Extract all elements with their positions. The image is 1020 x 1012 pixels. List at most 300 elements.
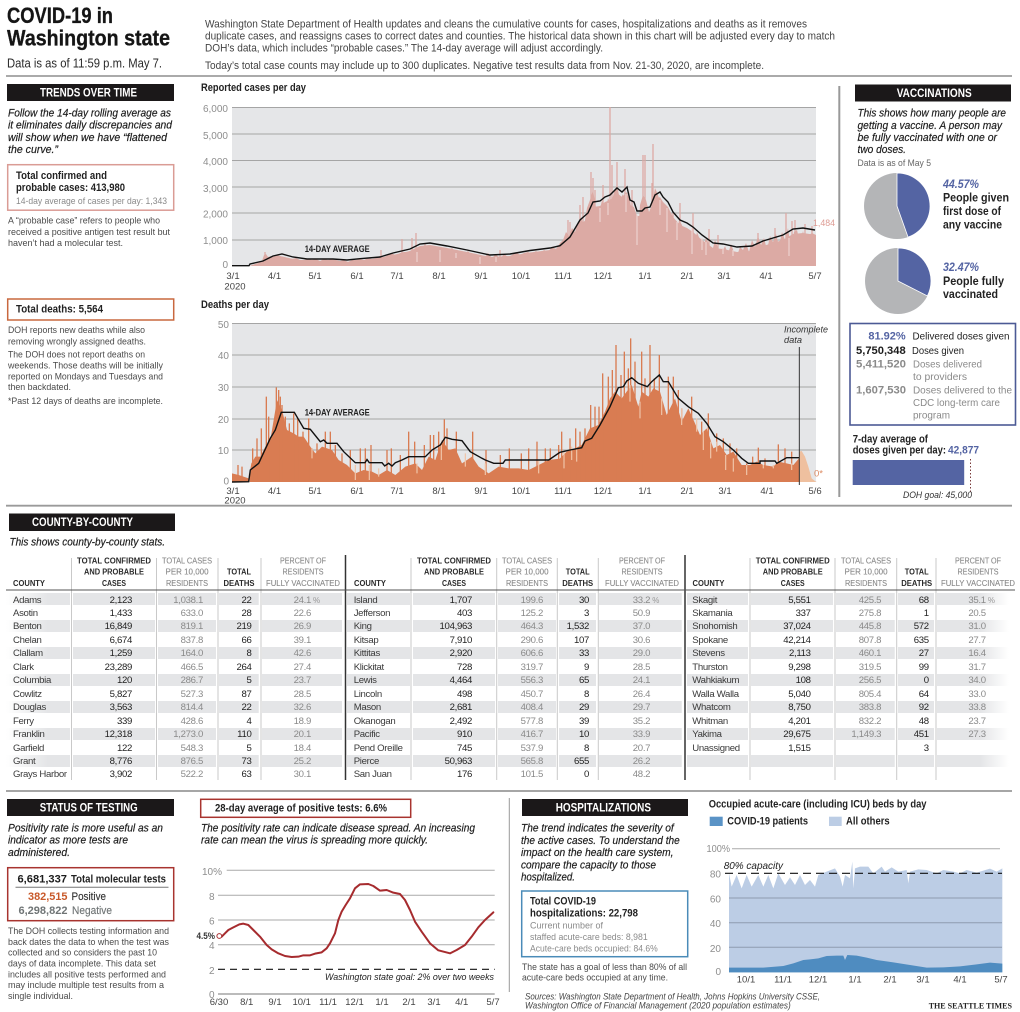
note: capacity goal: The state has a goal of less than 80% of all <box>522 961 687 972</box>
y axis labels: 20 <box>710 944 721 955</box>
title block: COVID-19 in <box>7 3 113 28</box>
table: Skagit to Unassigned: Unassigned <box>692 743 740 754</box>
table: Island to San Juan: Kittitas <box>354 648 380 659</box>
x axis labels: 7/1 <box>390 271 404 282</box>
intro note: duplicate cases, and reassigns cases to correct dates and counties. The historical data shown in this chart will be adjusted every day to match <box>205 30 835 42</box>
table: Island to San Juan: San Juan <box>354 769 392 780</box>
table: Adams to Grays Harbor: 6,674 <box>110 635 132 646</box>
table: Island to San Juan: 29.7 <box>633 702 650 713</box>
sources: Sources: Washington State Department of Health, Johns Hopkins University CSSE, <box>525 991 820 1001</box>
note: testing data: includes all positive tests performed and <box>8 968 166 979</box>
table: Adams to Grays Harbor: 73 <box>241 756 252 767</box>
y axis labels <box>706 844 730 978</box>
note: deaths reporting <box>7 324 163 406</box>
table: Skagit to Unassigned: Whitman <box>692 716 728 727</box>
note: deaths reporting: reported on Mondays and Tuesdays and <box>8 370 163 382</box>
column headers: table 3: RESIDENTS <box>845 578 887 588</box>
column headers: table 2: TOTAL CONFIRMED <box>417 556 491 566</box>
note: testing data: may include multiple test results from a <box>8 979 165 990</box>
table: Island to San Juan: 1,532 <box>567 621 589 632</box>
heading: hospitalizations <box>522 799 688 816</box>
x axis labels: 11/1 <box>319 997 337 1008</box>
x axis labels: 2020 <box>224 496 246 506</box>
table: Adams to Grays Harbor: 8 <box>246 648 252 659</box>
y axis labels: 30 <box>218 383 229 394</box>
box: total hospitalizations: Acute-care beds occupied: 84.6% <box>530 944 658 955</box>
box: total hospitalizations: staffed acute-care beds: 8,981 <box>530 932 648 943</box>
intro text: hospitalizations: compare the capacity to those <box>521 860 656 872</box>
label: latest 0*: 0* <box>814 469 823 480</box>
x axis labels: 5/6 <box>808 486 822 497</box>
table: Adams to Grays Harbor: 1,433 <box>110 608 132 619</box>
column headers: table 1: DEATHS <box>224 578 255 588</box>
note: testing data <box>8 925 169 1001</box>
table: Island to San Juan: 33 <box>579 648 589 659</box>
column headers: table 3: PERCENT OF <box>955 556 1001 566</box>
x axis labels <box>210 997 500 1008</box>
table: Skagit to Unassigned: 27 <box>919 648 929 659</box>
intro text: rolling average <box>8 108 173 156</box>
table: Island to San Juan: 577.8 <box>521 716 543 727</box>
x axis labels: 9/1 <box>268 997 282 1008</box>
x axis labels: 3/1 <box>427 997 441 1008</box>
column headers: table 3: TOTAL <box>905 566 929 576</box>
column headers: table 3: RESIDENTS <box>958 566 999 576</box>
table: Skagit to Unassigned: Wahkiakum <box>692 675 739 686</box>
box: test totals: Positive <box>72 891 106 903</box>
table: Adams to Grays Harbor: Cowlitz <box>13 689 42 700</box>
table: Island to San Juan: 2,681 <box>450 702 472 713</box>
column headers: table 2: RESIDENTS <box>506 578 548 588</box>
column headers: table 3: DEATHS <box>901 578 932 588</box>
table: Adams to Grays Harbor: 120 <box>117 675 132 686</box>
heading: county by county <box>9 514 175 531</box>
note: probable case: A “probable case” refers to people who <box>8 214 160 226</box>
stat: first dose: 44.57% <box>942 177 979 191</box>
capacity line: 80 percent <box>725 872 1002 874</box>
table: Skagit to Unassigned: 337 <box>796 608 811 619</box>
table: Adams to Grays Harbor: 16,849 <box>105 621 132 632</box>
intro text: vaccinations: two doses. <box>858 144 906 156</box>
box: doses: 1,607,530 <box>856 384 906 396</box>
table: Skagit to Unassigned: Walla Walla <box>692 689 739 700</box>
table: Adams to Grays Harbor: Grant <box>13 756 35 767</box>
area: covid-19 patients <box>729 955 1002 972</box>
table: Island to San Juan: 319.7 <box>521 662 543 673</box>
table: Island to San Juan: 26.4 <box>633 689 650 700</box>
panel: county by county <box>6 514 1015 780</box>
x axis labels: 8/1 <box>240 997 253 1008</box>
bar: 7-day average doses: DOH goal: 45,000 <box>903 490 972 500</box>
table: Adams to Grays Harbor: 819.1 <box>181 621 203 632</box>
label: 14-day average: 14-DAY AVERAGE <box>305 244 370 254</box>
callout: total deaths <box>8 299 174 320</box>
table: Skagit to Unassigned: 319.5 <box>859 662 881 673</box>
table: Island to San Juan: Jefferson <box>354 608 390 619</box>
column headers: table 2: PER 10,000 <box>506 566 549 576</box>
table: Island to San Juan: 33.9 <box>633 729 650 740</box>
chart title: deaths: Deaths per day <box>201 299 270 311</box>
stat: fully vaccinated: People fully <box>943 274 1004 288</box>
table: Island to San Juan: 9 <box>584 662 589 673</box>
table: Island to San Juan: 8 <box>584 743 589 754</box>
intro text: hospitalizations: impact on the health care system, <box>521 847 674 859</box>
box: doses <box>850 324 1016 425</box>
table: Island to San Juan: 537.9 <box>521 743 543 754</box>
x axis labels: 12/1 <box>809 975 827 986</box>
box: doses: to providers <box>913 372 967 383</box>
box: total hospitalizations <box>522 891 688 957</box>
table: Adams to Grays Harbor: 3,902 <box>110 769 132 780</box>
table: Island to San Juan: 498 <box>457 689 472 700</box>
table: Island to San Juan: 37.0 <box>633 621 650 632</box>
table: Skagit to Unassigned: Thurston <box>692 662 728 673</box>
table: Island to San Juan: 745 <box>457 743 472 754</box>
column headers: table 1: TOTAL <box>227 566 251 576</box>
box: doses: 5,750,348 <box>856 345 906 357</box>
bar: 7-day average doses: 42,877 <box>948 444 979 456</box>
table: Skagit to Unassigned: 34.0 <box>968 675 986 686</box>
table: Island to San Juan: 30.6 <box>633 635 650 646</box>
box: total hospitalizations: hospitalizations: 22,798 <box>530 908 638 920</box>
box: total hospitalizations: Current number of <box>530 921 603 932</box>
intro note: Washington State Department of Health updates and cleans the cumulative counts for cases, hospitalizations and deaths as it removes <box>205 18 807 30</box>
table: Adams to Grays Harbor: 23.7 <box>294 675 311 686</box>
y axis labels: 1,000 <box>203 236 228 247</box>
table: Island to San Juan: 104,963 <box>440 621 472 632</box>
x axis labels: 2/1 <box>883 975 897 986</box>
table: Adams to Grays Harbor: 39.1 <box>294 635 311 646</box>
y axis labels <box>202 867 222 1001</box>
column headers: table 2: DEATHS <box>562 578 593 588</box>
stat: first dose: first dose of <box>943 204 1001 218</box>
y axis labels: 50 <box>218 320 229 331</box>
table: Adams to Grays Harbor: Ferry <box>13 716 34 727</box>
table: Skagit to Unassigned: 33.8 <box>968 702 986 713</box>
table: Adams to Grays Harbor: 522.2 <box>181 769 203 780</box>
box: doses: Delivered doses given <box>912 331 1010 342</box>
column headers: table 1: COUNTY <box>13 578 45 588</box>
box: test totals: 6,298,822 <box>18 905 68 917</box>
box: test totals: Total molecular tests <box>71 873 166 885</box>
table: Island to San Juan: 50,963 <box>445 756 472 767</box>
y axis labels: 4,000 <box>203 157 228 168</box>
area: all others <box>729 862 1002 972</box>
sources <box>525 991 820 1010</box>
box: doses: Doses delivered <box>913 360 982 370</box>
table: Adams to Grays Harbor: 63 <box>241 769 252 780</box>
data date: Data is as of May 5 <box>858 158 931 168</box>
marker: start value: 4.5% <box>196 931 215 941</box>
y axis labels <box>203 104 228 271</box>
x axis labels: 3/1 <box>226 486 240 497</box>
callout: total cases: 14-day average of cases per day: 1,343 <box>16 196 167 207</box>
text: positivity explanation: The positivity rate can indicate disease spread. An increasing <box>201 822 475 834</box>
x axis labels: 6/1 <box>350 271 364 282</box>
note: probable case <box>8 214 170 248</box>
chart: positivity rate <box>196 867 500 1008</box>
table: Adams to Grays Harbor: 527.3 <box>181 689 203 700</box>
table: Adams to Grays Harbor: Franklin <box>13 729 45 740</box>
table: Skagit to Unassigned <box>687 593 1000 767</box>
note: testing data: collected and so considers the past 10 <box>8 947 157 958</box>
table: Skagit to Unassigned: 48 <box>919 716 929 727</box>
table: Island to San Juan: 556.3 <box>521 675 543 686</box>
note: deaths reporting: then backdated. <box>8 381 71 392</box>
stat: first dose: any vaccine <box>943 218 1002 232</box>
table: Adams to Grays Harbor: 28 <box>241 608 252 619</box>
callout: 28-day average <box>201 799 411 817</box>
table: Island to San Juan: 1,707 <box>450 595 472 606</box>
table: Adams to Grays Harbor: 3,563 <box>110 702 132 713</box>
table: Adams to Grays Harbor: 164.0 <box>181 648 203 659</box>
x axis labels: 4/1 <box>759 271 773 282</box>
table: Adams to Grays Harbor: 4 <box>246 716 252 727</box>
table: Skagit to Unassigned: 27.3 <box>968 729 986 740</box>
table: Island to San Juan: 24.1 <box>633 675 650 686</box>
table: Island to San Juan: 48.2 <box>633 769 650 780</box>
table: Adams to Grays Harbor: Clallam <box>13 648 43 659</box>
table: Island to San Juan <box>347 593 682 780</box>
annotation: incomplete data: Incomplete <box>784 325 828 335</box>
note: probable case: haven’t had a molecular test. <box>8 237 123 248</box>
chart: occupied beds <box>706 798 1008 986</box>
table: Island to San Juan: 450.7 <box>521 689 543 700</box>
y axis labels: 3,000 <box>203 184 228 195</box>
table: Skagit to Unassigned: 460.1 <box>859 648 881 659</box>
table: Island to San Juan: Lincoln <box>354 689 382 700</box>
y axis labels: 0 <box>209 990 215 1001</box>
table: Adams to Grays Harbor: 42.6 <box>294 648 311 659</box>
table: Adams to Grays Harbor: 28.5 <box>294 689 311 700</box>
y axis labels: 20 <box>218 415 229 426</box>
text: positivity explanation: rate can mean the virus is spreading more quickly. <box>201 834 428 846</box>
x axis labels: 9/1 <box>474 271 488 282</box>
x axis labels: 8/1 <box>432 486 446 497</box>
table: Island to San Juan: 107 <box>574 635 589 646</box>
note: testing data: single individual. <box>8 990 73 1001</box>
table: Adams to Grays Harbor: 1,273.0 <box>173 729 203 740</box>
column headers: table 3 <box>692 556 1015 588</box>
y axis labels: 6,000 <box>203 104 228 115</box>
table: Adams to Grays Harbor: 30.1 <box>294 769 311 780</box>
table: Skagit to Unassigned: Spokane <box>692 635 728 646</box>
table: Adams to Grays Harbor: 2,123 <box>110 595 132 606</box>
column headers: table 1: PERCENT OF <box>280 556 326 566</box>
intro text: positivity <box>8 822 163 859</box>
x axis labels <box>224 271 822 292</box>
table: Skagit to Unassigned: 99 <box>919 662 929 673</box>
table: Skagit to Unassigned: 451 <box>914 729 929 740</box>
table: Adams to Grays Harbor: 20.1 <box>294 729 311 740</box>
table: Skagit to Unassigned: % <box>988 596 995 605</box>
x axis labels: 2/1 <box>680 486 694 497</box>
column headers: table 2: TOTAL <box>566 566 590 576</box>
table: Adams to Grays Harbor: 5,827 <box>110 689 132 700</box>
table: Adams to Grays Harbor: 25.2 <box>294 756 311 767</box>
table: Skagit to Unassigned: 0 <box>924 675 929 686</box>
x axis labels: 12/1 <box>594 486 612 497</box>
table: Skagit to Unassigned: 92 <box>919 702 929 713</box>
bars: daily deaths, left part <box>232 387 562 482</box>
heading: status of testing <box>7 799 174 816</box>
x axis labels: 10/1 <box>737 975 755 986</box>
intro note: DOH’s data, which includes “probable cases.” The 14-day average will adjust accordingly. <box>205 42 603 54</box>
box: doses: 5,411,520 <box>856 358 906 370</box>
table: Adams to Grays Harbor: 26.9 <box>294 621 311 632</box>
table: Skagit to Unassigned: 275.8 <box>859 608 881 619</box>
table: Island to San Juan: 26.2 <box>633 756 650 767</box>
x axis labels: 7/1 <box>390 486 404 497</box>
table: Adams to Grays Harbor: Benton <box>13 621 42 632</box>
box: test totals: 382,515 <box>28 891 68 903</box>
pie chart: first dose <box>864 173 930 239</box>
x axis labels: 5/1 <box>308 486 322 497</box>
table: Island to San Juan: 565.8 <box>521 756 543 767</box>
table: Adams to Grays Harbor: 23,289 <box>105 662 132 673</box>
table: Skagit to Unassigned: 31.7 <box>968 662 986 673</box>
heading: vaccinations: VACCINATIONS <box>897 86 972 100</box>
table: Adams to Grays Harbor: 548.3 <box>181 743 203 754</box>
intro text: hospitalizations: The trend indicates the severity of <box>521 823 675 835</box>
table: Adams to Grays Harbor: 5 <box>246 675 252 686</box>
x axis labels <box>737 975 1008 986</box>
table: Skagit to Unassigned: 23.7 <box>968 716 986 727</box>
table: Skagit to Unassigned: Skamania <box>692 608 732 619</box>
table: Adams to Grays Harbor: % <box>313 596 320 605</box>
sources: Washington Office of Financial Management (2020 population estimates) <box>525 1000 791 1010</box>
table: Island to San Juan: 50.9 <box>633 608 650 619</box>
table: Island to San Juan: 728 <box>457 662 472 673</box>
x axis labels: 4/1 <box>268 486 281 497</box>
note: capacity goal <box>522 961 687 983</box>
table: Adams to Grays Harbor: Clark <box>13 662 34 673</box>
intro text: hospitalizations: hospitalized. <box>521 872 575 884</box>
box: doses: Doses given <box>912 346 964 357</box>
table: Adams to Grays Harbor: Grays Harbor <box>13 769 67 780</box>
y axis labels: 100% <box>706 844 730 855</box>
table: Skagit to Unassigned: 35.1 <box>968 595 986 606</box>
table: Adams to Grays Harbor: 428.6 <box>181 716 203 727</box>
table: Adams to Grays Harbor: 22 <box>241 595 252 606</box>
county table graphics and column headers <box>6 514 1015 780</box>
table: Skagit to Unassigned: 29,675 <box>783 729 811 740</box>
title block <box>7 3 170 70</box>
column headers: table 1: CASES <box>102 578 126 588</box>
table: Adams to Grays Harbor: 24.1 <box>294 595 311 606</box>
y axis labels: 2 <box>209 966 215 977</box>
table: Adams to Grays Harbor: Chelan <box>13 635 41 646</box>
table: Island to San Juan: 4,464 <box>450 675 472 686</box>
table: Skagit to Unassigned: 5,551 <box>788 595 811 606</box>
table: Island to San Juan: Pend Oreille <box>354 743 403 754</box>
table: Skagit to Unassigned: 8,750 <box>788 702 811 713</box>
y axis labels: 6 <box>209 916 215 928</box>
column headers: table 3: TOTAL CONFIRMED <box>756 556 830 566</box>
title block: Data is as of 11:59 p.m. May 7. <box>7 56 162 70</box>
chart title: beds: Occupied acute-care (including ICU) beds by day <box>709 798 927 810</box>
y axis labels: 0 <box>223 476 229 488</box>
intro note: Today’s total case counts may include up to 300 duplicates. Negative test results data from Nov. 21-30, 2020, are incomplete. <box>205 60 764 72</box>
line: 14-day average deaths <box>232 375 799 482</box>
callout: 28-day average: 28-day average of positive tests: 6.6% <box>215 803 387 815</box>
x axis labels: 3/1 <box>718 486 732 497</box>
note: deaths reporting: *Past 12 days of deaths are incomplete. <box>8 395 163 406</box>
x axis labels: 11/1 <box>554 271 572 282</box>
intro text: rolling average: it eliminates daily discrepancies and <box>8 120 173 132</box>
table: Skagit to Unassigned: 42,214 <box>783 635 811 646</box>
column headers: table 1: TOTAL CASES <box>162 556 212 566</box>
column headers: table 3: CASES <box>781 578 805 588</box>
column headers: table 2 <box>354 556 679 588</box>
table: Skagit to Unassigned: 425.5 <box>859 595 881 606</box>
table: Island to San Juan: 7,910 <box>450 635 472 646</box>
table: Island to San Juan: % <box>652 596 659 605</box>
table: Skagit to Unassigned: 805.4 <box>859 689 881 700</box>
column headers: table 1: FULLY VACCINATED <box>266 578 340 588</box>
table: Adams to Grays Harbor: 339 <box>117 716 132 727</box>
table: Adams to Grays Harbor: 837.8 <box>181 635 203 646</box>
column headers: table 2: TOTAL CASES <box>502 556 552 566</box>
x axis labels: 6/1 <box>350 486 364 497</box>
box: test totals <box>8 868 174 921</box>
table: Adams to Grays Harbor: 466.5 <box>181 662 203 673</box>
x axis labels: 10/1 <box>512 271 530 282</box>
box: doses: CDC long-term care <box>913 398 1000 409</box>
note: deaths reporting: weekends. Those deaths will be initially <box>7 360 163 370</box>
intro text: hospitalizations <box>521 823 680 884</box>
x axis labels: 4/1 <box>455 997 468 1008</box>
title block: Washington state <box>7 26 170 50</box>
table: Skagit to Unassigned: 68 <box>919 595 929 606</box>
x axis labels: 1/1 <box>638 486 652 497</box>
table: Adams to Grays Harbor: 12,318 <box>105 729 132 740</box>
heading: trends over time <box>7 84 174 101</box>
y axis labels: 4 <box>209 941 215 952</box>
table: Adams to Grays Harbor: 876.5 <box>181 756 203 767</box>
table: Island to San Juan: Klickitat <box>354 662 384 673</box>
note: probable case: received a positive antigen test result but <box>8 226 170 237</box>
column headers: table 2: COUNTY <box>354 578 386 588</box>
x axis labels: 1/1 <box>848 975 862 986</box>
x axis labels: 2020 <box>224 282 246 292</box>
table: Skagit to Unassigned: 37,024 <box>783 621 811 632</box>
table: Island to San Juan: 65 <box>579 675 589 686</box>
table: Island to San Juan: Mason <box>354 702 381 713</box>
table: Skagit to Unassigned: 832.2 <box>859 716 881 727</box>
table: Adams to Grays Harbor: 8,776 <box>110 756 132 767</box>
table: Island to San Juan: 176 <box>457 769 472 780</box>
table: Island to San Juan: 2,920 <box>450 648 472 659</box>
annotation: incomplete data <box>784 325 828 485</box>
table: Adams to Grays Harbor: 22 <box>241 702 252 713</box>
table: Island to San Juan: 290.6 <box>521 635 543 646</box>
table: Skagit to Unassigned: Snohomish <box>692 621 737 632</box>
table: Adams to Grays Harbor: 264 <box>236 662 252 673</box>
table: Island to San Juan: 39 <box>579 716 589 727</box>
y axis labels: 0 <box>715 967 721 978</box>
box: total hospitalizations: Total COVID-19 <box>530 895 596 907</box>
table: Adams to Grays Harbor: 286.7 <box>181 675 203 686</box>
note: testing data: back dates the data to when the test was <box>8 936 169 947</box>
table: Adams to Grays Harbor: Garfield <box>13 743 44 754</box>
table: Adams to Grays Harbor: 66 <box>241 635 252 646</box>
table: Skagit to Unassigned: 1 <box>924 608 929 619</box>
callout: total cases <box>8 165 174 210</box>
x axis labels: 2/1 <box>680 271 694 282</box>
table: Skagit to Unassigned: Whatcom <box>692 702 731 713</box>
table: Island to San Juan: 2,492 <box>450 716 472 727</box>
